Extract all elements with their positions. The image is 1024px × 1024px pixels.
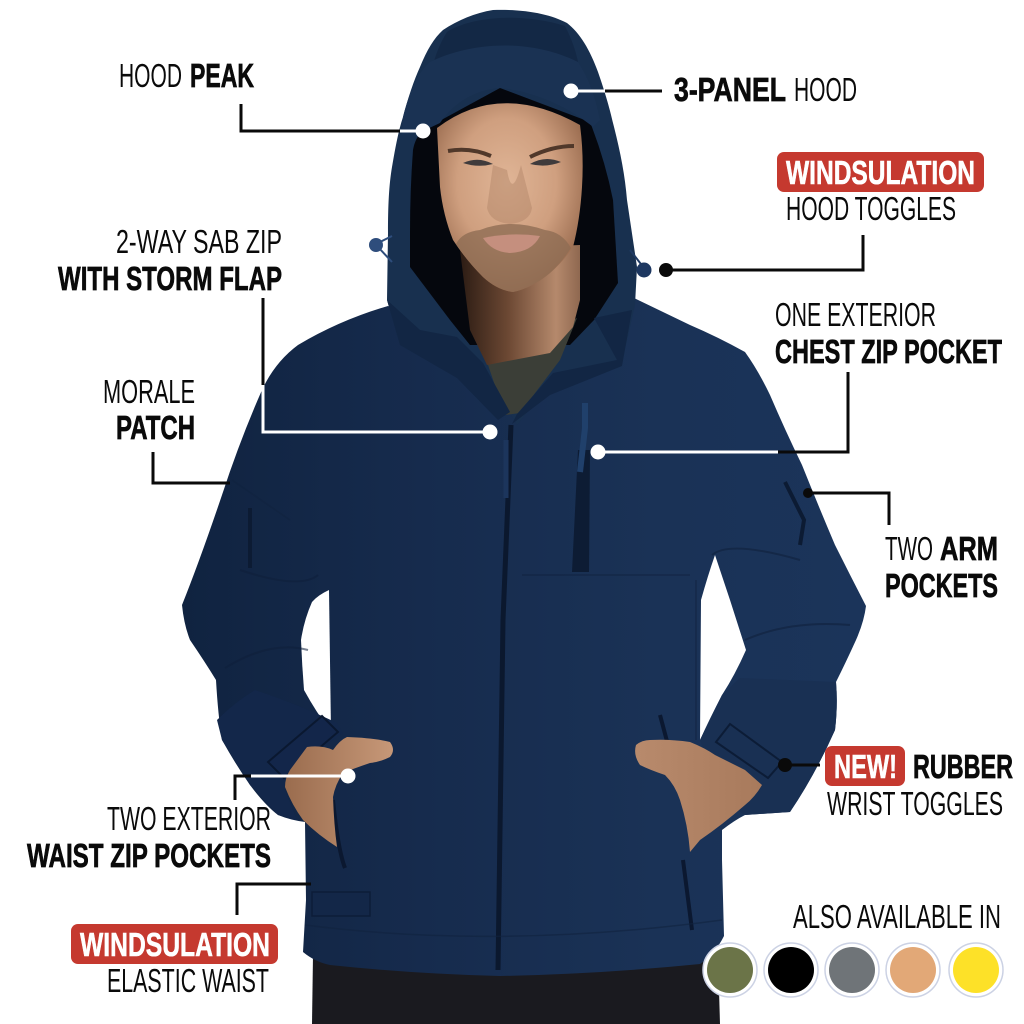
callout lines <box>153 91 889 915</box>
right cuff <box>700 678 837 815</box>
label: waist zip pockets: TWO EXTERIOR <box>107 800 271 837</box>
hood outer <box>387 10 637 425</box>
right toggle <box>630 250 652 278</box>
right collar <box>512 310 632 424</box>
left hand <box>285 737 393 847</box>
white callout dots <box>340 84 606 784</box>
beard stubble <box>456 224 571 292</box>
chest zip pocket <box>572 450 590 572</box>
label: windsulation hood toggles <box>777 152 984 227</box>
right hand <box>635 740 762 852</box>
colour swatches <box>703 943 1003 997</box>
center zip <box>498 425 511 970</box>
eyebrows <box>448 146 574 157</box>
hood top panel <box>430 18 580 80</box>
label: 2-way sab zip: WITH STORM FLAP <box>58 260 282 297</box>
label: hood peak: HOOD <box>119 57 182 94</box>
face <box>437 103 583 292</box>
label: two arm pockets: ARM <box>940 530 998 567</box>
left arm gap <box>301 590 331 732</box>
label: morale patch: PATCH <box>116 409 195 446</box>
hem <box>305 920 722 936</box>
right cuff tab <box>716 724 782 778</box>
center zip pull <box>504 440 508 498</box>
label: windsulation elastic waist: ELASTIC WAIST <box>107 962 269 999</box>
left cuff tab <box>268 716 338 778</box>
label: waist zip pockets: WAIST ZIP POCKETS <box>27 837 271 874</box>
nose shadow <box>487 165 532 224</box>
label: rubber wrist toggles: NEW! <box>834 748 897 785</box>
hood <box>369 10 652 425</box>
label: chest zip pocket: ONE EXTERIOR <box>775 296 936 333</box>
label: 2-way sab zip: 2-WAY SAB ZIP <box>116 223 282 260</box>
label: rubber wrist toggles <box>825 746 1013 822</box>
jacket body and sleeves <box>182 298 866 976</box>
label: two arm pockets <box>885 530 998 604</box>
label: hood peak: PEAK <box>190 57 254 94</box>
label: windsulation elastic waist: WINDSULATION <box>80 926 270 963</box>
mouth <box>483 234 540 253</box>
waist pockets <box>333 715 692 930</box>
left cuff <box>217 690 343 820</box>
arm pocket zips <box>250 482 804 568</box>
label: morale patch: MORALE <box>103 373 195 410</box>
neck <box>460 245 580 365</box>
label: morale patch <box>103 373 195 446</box>
label: 3-panel hood: 3-PANEL <box>674 71 786 108</box>
hood peak <box>402 45 600 135</box>
label: waist zip pockets <box>27 800 271 874</box>
pants <box>312 955 720 1024</box>
label: two arm pockets: TWO <box>885 530 933 567</box>
chest zip pull <box>580 403 585 472</box>
seams <box>232 480 696 740</box>
label: windsulation elastic waist <box>71 924 278 999</box>
t-shirt <box>487 318 577 415</box>
waist label <box>312 892 370 916</box>
left collar <box>387 300 510 420</box>
hood inside <box>410 88 618 345</box>
label: chest zip pocket <box>775 296 1002 370</box>
label: 2-way sab zip <box>58 223 282 297</box>
black callout dots <box>659 263 813 772</box>
eyes <box>463 159 561 166</box>
right arm gap <box>700 555 746 740</box>
label: 3-panel hood: HOOD <box>794 71 857 108</box>
sleeve folds <box>225 549 850 668</box>
left toggle <box>369 236 392 262</box>
jacket <box>182 298 866 976</box>
